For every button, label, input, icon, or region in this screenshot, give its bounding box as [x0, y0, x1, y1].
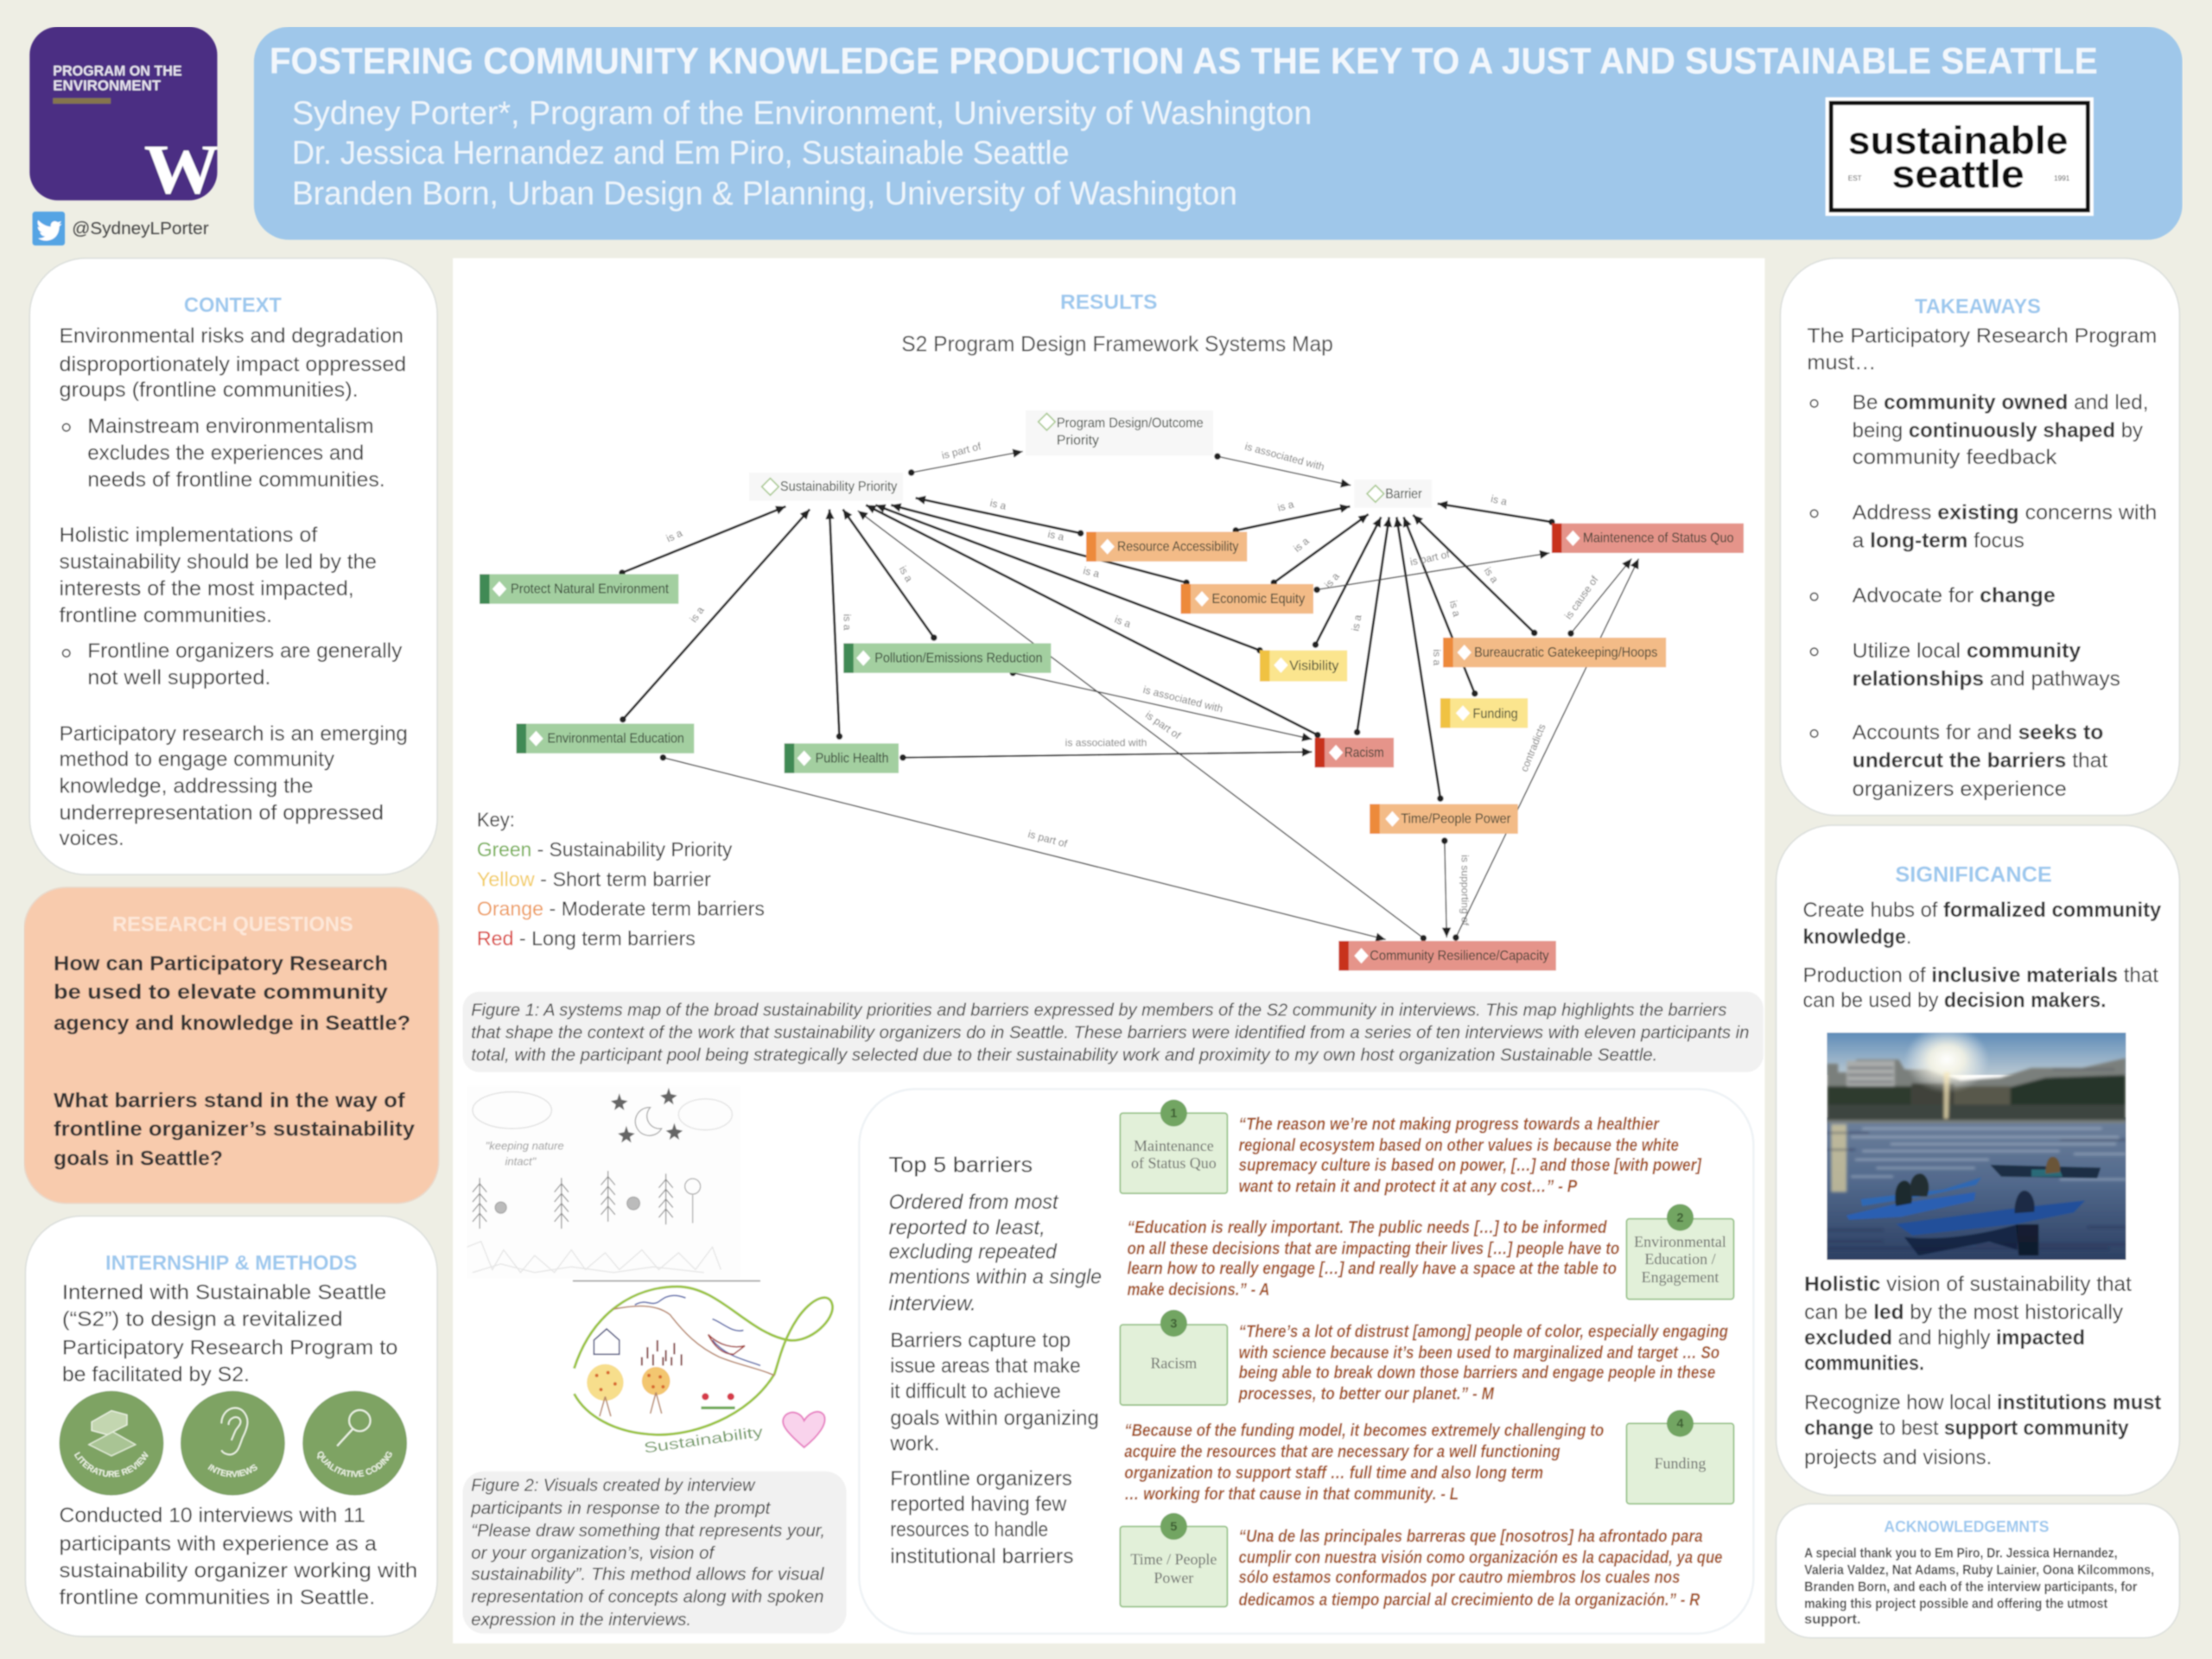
node: funding	[1440, 698, 1528, 728]
map edge labels: is part of	[940, 440, 982, 461]
takeaways list: Be community owned and led,	[1853, 391, 2149, 414]
map edge labels: is a	[1482, 565, 1501, 585]
significance intro: knowledge.	[1803, 925, 1911, 949]
node: maintenence of status quo	[1552, 524, 1744, 553]
methods text	[60, 1504, 417, 1609]
map edge labels	[664, 440, 1601, 926]
figure 2 caption: participants in response to the prompt	[470, 1499, 772, 1518]
header banner	[254, 27, 2183, 240]
barrier 2 card: Education /	[1644, 1250, 1716, 1268]
heading: takeaways: TAKEAWAYS	[1915, 296, 2041, 318]
context text: interests of the most impacted,	[60, 577, 354, 601]
significance conclusions: can be led by the most historically	[1804, 1301, 2123, 1325]
panel: context	[29, 258, 437, 874]
top 5 description: reported having few	[890, 1493, 1067, 1516]
top 5 description: Ordered from most	[889, 1191, 1059, 1214]
barrier 4 card: 4	[1676, 1417, 1684, 1431]
significance intro: Create hubs of formalized community	[1803, 899, 2162, 922]
takeaways list: Address existing concerns with	[1853, 501, 2157, 524]
barrier 5 quote: “Una de las principales barreras que [nosotros] ha afrontado para	[1238, 1526, 1703, 1546]
panel: research questions	[24, 887, 439, 1204]
top 5 description: resources to handle	[890, 1518, 1048, 1541]
barrier 4 quote	[1124, 1421, 1604, 1504]
top 5 description: issue areas that make	[890, 1355, 1081, 1378]
node: protect natural environment: Protect Natural Environment	[511, 582, 670, 597]
top 5 description: excluding repeated	[889, 1240, 1058, 1263]
heading: internship and methods: INTERNSHIP & METHODS	[105, 1252, 357, 1274]
barrier 4 card: Funding	[1655, 1455, 1706, 1472]
methods text: frontline communities in Seattle.	[60, 1586, 375, 1609]
figure 2 caption: sustainability”. This method allows for visual	[471, 1566, 824, 1585]
figure 1 caption: Figure 1: A systems map of the broad sustainability priorities and barriers expressed by members of the S2 community in interviews. This map highlights the barriers	[471, 1001, 1726, 1020]
icon: qualitative coding	[302, 1389, 408, 1497]
barrier 5 card: Power	[1154, 1569, 1193, 1586]
node: economic equity: Economic Equity	[1211, 592, 1306, 607]
node: barrier: Barrier	[1385, 486, 1422, 501]
map edge labels: is associated with	[1142, 683, 1224, 715]
drawing: sustainability leaf	[573, 1281, 833, 1457]
context text: not well supported.	[87, 666, 270, 690]
icon: interviews	[180, 1389, 286, 1497]
logo: sustainable seattle	[1826, 98, 2094, 216]
methods text: Conducted 10 interviews with 11	[60, 1504, 365, 1528]
barrier 3 quote: processes, to better our planet.” - M	[1238, 1384, 1495, 1404]
title: FOSTERING COMMUNITY KNOWLEDGE PRODUCTION AS THE KEY TO A JUST AND SUSTAINABLE SEATTLE	[270, 41, 2098, 81]
figure 1 caption: total, with the participant pool being strategically selected due to their sustainability work and proximity to my own host organization Sustainable Seattle.	[471, 1046, 1657, 1065]
takeaways list: being continuously shaped by	[1853, 419, 2143, 442]
takeaways intro: must…	[1807, 352, 1876, 375]
barrier 1 quote: supremacy culture is based on power, […] and those [with power]	[1238, 1155, 1702, 1175]
takeaways list: organizers experience	[1853, 778, 2067, 801]
barrier 4 card	[1626, 1410, 1734, 1503]
questions text	[54, 952, 416, 1171]
figure 2 caption: “Please draw something that represents your,	[471, 1522, 825, 1541]
node: program design outcome priority	[1026, 410, 1213, 455]
figure 1 caption	[463, 992, 1764, 1072]
map edge labels: is associated with	[1243, 440, 1325, 473]
context text	[60, 325, 408, 850]
context text: sustainability should be led by the	[60, 550, 377, 574]
map key: Green - Sustainability Priority	[477, 838, 733, 861]
barrier 3 card: Racism	[1150, 1355, 1197, 1372]
logo: Program on the Environment: W	[144, 130, 220, 209]
node: racism: Racism	[1344, 746, 1384, 760]
node: public health	[785, 743, 899, 773]
context text: Participatory research is an emerging	[60, 722, 408, 746]
barrier 3 quote: being able to break down those barriers and engage people in these	[1238, 1363, 1715, 1382]
node: sustainability priority: Sustainability Priority	[780, 480, 898, 494]
map key: Red - Long term barriers	[477, 927, 696, 950]
context text: knowledge, addressing the	[60, 775, 313, 798]
map edge labels: is a	[687, 604, 707, 625]
node: program design outcome priority: Program Design/Outcome	[1057, 416, 1204, 431]
map edge labels: is a	[1046, 528, 1065, 543]
figure 2 caption: representation of concepts along with spoken	[471, 1588, 823, 1607]
figure 2 caption: Figure 2: Visuals created by interview	[471, 1477, 756, 1496]
icon: qualitative coding: QUALITATIVE CODING	[316, 1450, 393, 1478]
significance intro	[1803, 899, 2162, 1013]
context text: excludes the experiences and	[87, 442, 364, 465]
context text: method to engage community	[60, 748, 334, 772]
heading: results: RESULTS	[1060, 291, 1157, 315]
context text: voices.	[60, 827, 124, 850]
authors: Branden Born, Urban Design & Planning, University of Washington	[292, 175, 1237, 212]
map key: Yellow - Short term barrier	[477, 868, 711, 890]
map key: Key:	[477, 809, 515, 831]
logo: sustainable seattle: seattle	[1891, 152, 2024, 196]
logo: Program on the Environment: PROGRAM ON THE	[53, 63, 182, 79]
map edge labels: is a	[897, 563, 915, 584]
top 5 description: work.	[889, 1432, 939, 1455]
takeaways list: community feedback	[1853, 446, 2056, 469]
authors: Dr. Jessica Hernandez and Em Piro, Sustainable Seattle	[292, 134, 1070, 170]
barrier 3 card: 3	[1170, 1317, 1177, 1331]
barrier 1 quote: want to retain it and protect it at any cost…” - P	[1238, 1177, 1578, 1197]
map key: Orange - Moderate term barriers	[477, 898, 765, 920]
barrier 1 card	[1120, 1100, 1227, 1193]
node: protect natural environment	[480, 574, 678, 604]
node: resource accessibility	[1086, 532, 1247, 562]
barrier 2 card: 2	[1676, 1211, 1684, 1225]
logo: sustainable seattle: sustainable	[1848, 118, 2068, 162]
context text: Mainstream environmentalism	[87, 415, 374, 438]
node: racism	[1315, 738, 1394, 767]
photo: kayakers at sunrise	[1827, 1026, 2126, 1260]
barrier 5 quote: sólo estamos conformados por cautro miembros los cuales nos	[1238, 1567, 1680, 1587]
top 5 description: it difficult to achieve	[890, 1380, 1061, 1403]
node: funding: Funding	[1472, 707, 1518, 721]
heading: research questions: RESEARCH QUESTIONS	[112, 914, 353, 937]
map edge labels: is a	[1276, 498, 1295, 514]
barrier 4 quote: … working for that cause in that community. - L	[1124, 1484, 1459, 1504]
map edge labels: is cause of	[1562, 573, 1601, 621]
map title: S2 Program Design Framework Systems Map	[901, 333, 1333, 357]
node: visibility: Visibility	[1289, 659, 1339, 674]
node: community resilience capacity: Community Resilience/Capacity	[1370, 949, 1549, 963]
methods text: sustainability organizer working with	[60, 1559, 417, 1582]
node: pollution emissions reduction	[843, 643, 1051, 673]
internship text: Participatory Research Program to	[62, 1336, 397, 1359]
panel: results	[453, 258, 1764, 1643]
questions text: goals in Seattle?	[54, 1147, 223, 1171]
logo: Program on the Environment: ENVIRONMENT	[53, 78, 161, 93]
internship text: Interned with Sustainable Seattle	[62, 1281, 386, 1305]
acknowledgements text	[1804, 1546, 2154, 1627]
barrier 2 quote: make decisions.” - A	[1127, 1280, 1269, 1300]
barrier 1 quote	[1238, 1115, 1702, 1197]
questions text: be used to elevate community	[54, 981, 389, 1004]
drawing: sustainability leaf: Sustainability	[643, 1422, 765, 1457]
barrier 1 quote: “The reason we’re not making progress towards a healthier	[1238, 1115, 1660, 1135]
node: time people power: Time/People Power	[1401, 812, 1511, 827]
takeaways list: Accounts for and seeks to	[1853, 721, 2103, 745]
barrier 5 quote: cumplir con nuestra visión como organización es la capacidad, ya que	[1238, 1548, 1722, 1567]
barrier 2 card	[1626, 1204, 1734, 1300]
map edge labels: is a	[1082, 564, 1101, 580]
context text: frontline communities.	[60, 604, 272, 627]
panel: internship and methods	[24, 1215, 438, 1637]
node: public health: Public Health	[816, 751, 889, 766]
node: pollution emissions reduction: Pollution/Emissions Reduction	[874, 652, 1043, 666]
map edge labels: contradicts	[1518, 722, 1548, 773]
authors	[292, 95, 1312, 212]
logo: Program on the Environment	[29, 27, 220, 209]
significance intro: can be used by decision makers.	[1803, 989, 2107, 1013]
icon: literature review	[59, 1389, 164, 1497]
node: economic equity	[1181, 584, 1313, 613]
takeaways list: a long-term focus	[1853, 529, 2024, 552]
top 5 description: reported to least,	[889, 1217, 1046, 1240]
significance conclusions: Recognize how local institutions must	[1804, 1391, 2161, 1414]
context text: groups (frontline communities).	[60, 378, 359, 402]
map edge labels: is part of	[1027, 828, 1069, 850]
top 5 heading: Top 5 barriers	[889, 1154, 1033, 1178]
context text: Environmental risks and degradation	[60, 325, 404, 348]
top 5 description: Barriers capture top	[890, 1329, 1071, 1352]
node: sustainability priority	[749, 473, 903, 501]
context text: disproportionately impact oppressed	[60, 353, 406, 376]
node: environmental education: Environmental Education	[547, 732, 684, 747]
icon: interviews: INTERVIEWS	[207, 1464, 258, 1478]
panel: significance	[1777, 825, 2179, 1496]
systems map	[480, 410, 1744, 970]
barrier 3 card	[1120, 1310, 1227, 1405]
significance conclusions: change to best support community	[1804, 1416, 2129, 1440]
twitter handle	[33, 212, 209, 245]
barrier 5 card: 5	[1170, 1520, 1177, 1534]
context text: Holistic implementations of	[60, 524, 318, 547]
map edge labels: is a	[1490, 493, 1509, 508]
map edge labels: is part of	[1143, 709, 1183, 742]
barrier 4 quote: “Because of the funding model, it becomes extremely challenging to	[1124, 1421, 1604, 1440]
map key	[477, 809, 765, 950]
node: barrier	[1354, 480, 1432, 508]
barrier 1 card: of Status Quo	[1131, 1154, 1217, 1172]
takeaways list: relationships and pathways	[1853, 667, 2120, 690]
panel: top 5 barriers	[859, 1089, 1753, 1634]
questions text: frontline organizer’s sustainability	[54, 1117, 416, 1141]
node: bureaucratic gatekeeping hoops: Bureaucratic Gatekeeping/Hoops	[1474, 645, 1658, 660]
heading: context: CONTEXT	[184, 295, 282, 317]
acknowledgements text: Valeria Valdez, Nat Adams, Ruby Lainier, Oona Kilcommons,	[1804, 1563, 2154, 1578]
map edge labels: is a	[1113, 613, 1133, 630]
map edge labels: is part of	[1409, 548, 1451, 569]
drawing: pencil nature sketch: "keeping nature	[486, 1140, 564, 1153]
barrier 2 card: Environmental	[1634, 1233, 1726, 1250]
drawing: pencil nature sketch	[467, 1086, 741, 1278]
methods text: participants with experience as a	[60, 1532, 378, 1555]
significance conclusions: excluded and highly impacted	[1804, 1326, 2085, 1350]
barrier 4 quote: organization to support staff … full time and also long term	[1124, 1463, 1543, 1483]
acknowledgements text: making this project possible and offering the utmost	[1804, 1597, 2108, 1611]
takeaways intro	[1807, 325, 2157, 375]
map edge labels: is a	[988, 497, 1007, 512]
node: maintenence of status quo: Maintenence of Status Quo	[1583, 531, 1734, 546]
top 5 description: goals within organizing	[890, 1407, 1099, 1430]
map edge labels: is associated with	[1065, 737, 1147, 749]
logo: sustainable seattle: EST	[1848, 175, 1862, 182]
acknowledgements text: support.	[1804, 1612, 1860, 1627]
map edge labels: is a	[1349, 613, 1364, 632]
top 5 description: mentions within a single	[889, 1266, 1102, 1289]
drawing: pencil nature sketch: intact"	[505, 1155, 537, 1168]
barrier 3 quote	[1238, 1322, 1728, 1404]
barrier 5 card	[1120, 1513, 1227, 1607]
internship text	[62, 1281, 397, 1386]
logo: sustainable seattle: 1991	[2054, 175, 2070, 182]
barrier 1 card: 1	[1170, 1107, 1177, 1121]
node: environmental education	[517, 724, 694, 753]
internship text: (“S2”) to design a revitalized	[62, 1308, 343, 1332]
figure 1 caption: that shape the context of the work that sustainability organizers do in Seattle. These barriers were identified from a series of ten interviews with eleven participants in	[471, 1024, 1749, 1043]
barrier 5 quote: dedicamos a tiempo parcial al crecimiento de la organización.” - R	[1238, 1590, 1700, 1610]
heading: significance: SIGNIFICANCE	[1895, 862, 2052, 887]
significance intro: Production of inclusive materials that	[1803, 963, 2158, 987]
authors: Sydney Porter*, Program of the Environment, University of Washington	[292, 95, 1312, 131]
map edge labels: is a	[841, 614, 853, 631]
significance conclusions: communities.	[1804, 1351, 1924, 1375]
significance conclusions	[1804, 1273, 2161, 1470]
barrier 4 quote: acquire the resources that are necessary for a well functioning	[1124, 1442, 1560, 1462]
top 5 description: Frontline organizers	[890, 1467, 1072, 1491]
heading: acknowledgements: ACKNOWLEDGEMNTS	[1884, 1517, 2049, 1535]
acknowledgements text: A special thank you to Em Piro, Dr. Jessica Hernandez,	[1804, 1546, 2118, 1560]
map connectors	[622, 451, 1638, 939]
map edge labels: is a	[664, 527, 684, 544]
significance conclusions: projects and visions.	[1804, 1446, 1992, 1470]
top 5 description: institutional barriers	[890, 1545, 1074, 1568]
context text: needs of frontline communities.	[87, 468, 385, 492]
takeaways list: Utilize local community	[1853, 639, 2082, 663]
barrier 2 quote: learn how to really engage […] and really have a space at the table to	[1127, 1258, 1617, 1278]
barrier 2 card: Engagement	[1642, 1268, 1719, 1286]
icon: literature review: LITERATURE REVIEW	[73, 1451, 149, 1478]
top 5 description: interview.	[889, 1293, 976, 1316]
barrier 3 quote: with science because it’s been used to marginalized and target … So	[1238, 1343, 1719, 1363]
barrier 2 quote	[1127, 1217, 1619, 1300]
barrier 2 quote: “Education is really important. The public needs […] to be informed	[1127, 1217, 1607, 1237]
takeaways intro: The Participatory Research Program	[1807, 325, 2157, 348]
significance conclusions: Holistic vision of sustainability that	[1804, 1273, 2132, 1296]
map edge labels: is a	[1322, 570, 1342, 590]
node: visibility	[1260, 651, 1347, 682]
figure 2 caption: expression in the interviews.	[471, 1611, 691, 1630]
map edge labels: is supporting of	[1459, 855, 1471, 926]
twitter handle: @SydneyLPorter	[72, 219, 209, 238]
takeaways list: Advocate for change	[1853, 584, 2056, 607]
questions text: agency and knowledge in Seattle?	[54, 1012, 410, 1035]
barrier 3 quote: “There’s a lot of distrust [among] people of color, especially engaging	[1238, 1322, 1728, 1342]
internship text: be facilitated by S2.	[62, 1363, 250, 1386]
panel: takeaways	[1780, 258, 2179, 816]
node: resource accessibility: Resource Accessibility	[1117, 540, 1239, 555]
map edge labels: is a	[1447, 599, 1463, 618]
node: bureaucratic gatekeeping hoops	[1443, 638, 1666, 667]
context text: Frontline organizers are generally	[87, 639, 402, 663]
figure 2 caption	[463, 1471, 847, 1634]
acknowledgements text: Branden Born, and each of the interview participants, for	[1804, 1580, 2137, 1595]
questions text: What barriers stand in the way of	[54, 1090, 405, 1113]
top 5 description	[889, 1191, 1102, 1568]
takeaways list	[1810, 391, 2157, 801]
node: community resilience capacity	[1338, 941, 1556, 970]
node: program design outcome priority: Priority	[1057, 433, 1099, 448]
barrier 2 quote: on all these decisions that are impacting their lives […] people have to	[1127, 1238, 1619, 1258]
map edge labels: is a	[1431, 649, 1443, 665]
barrier 5 quote	[1238, 1526, 1722, 1610]
map edge labels: is a	[1291, 535, 1312, 555]
barrier 1 card: Maintenance	[1134, 1137, 1214, 1154]
barrier 1 quote: regional ecosystem based on other values is because the white	[1238, 1135, 1679, 1155]
takeaways list: undercut the barriers that	[1853, 749, 2108, 772]
questions text: How can Participatory Research	[54, 952, 388, 976]
context text: underrepresentation of oppressed	[60, 802, 384, 825]
barrier 5 card: Time / People	[1130, 1551, 1217, 1568]
panel: acknowledgements	[1777, 1503, 2179, 1638]
node: time people power	[1370, 804, 1518, 834]
figure 2 caption: or your organization’s, vision of	[471, 1544, 716, 1563]
